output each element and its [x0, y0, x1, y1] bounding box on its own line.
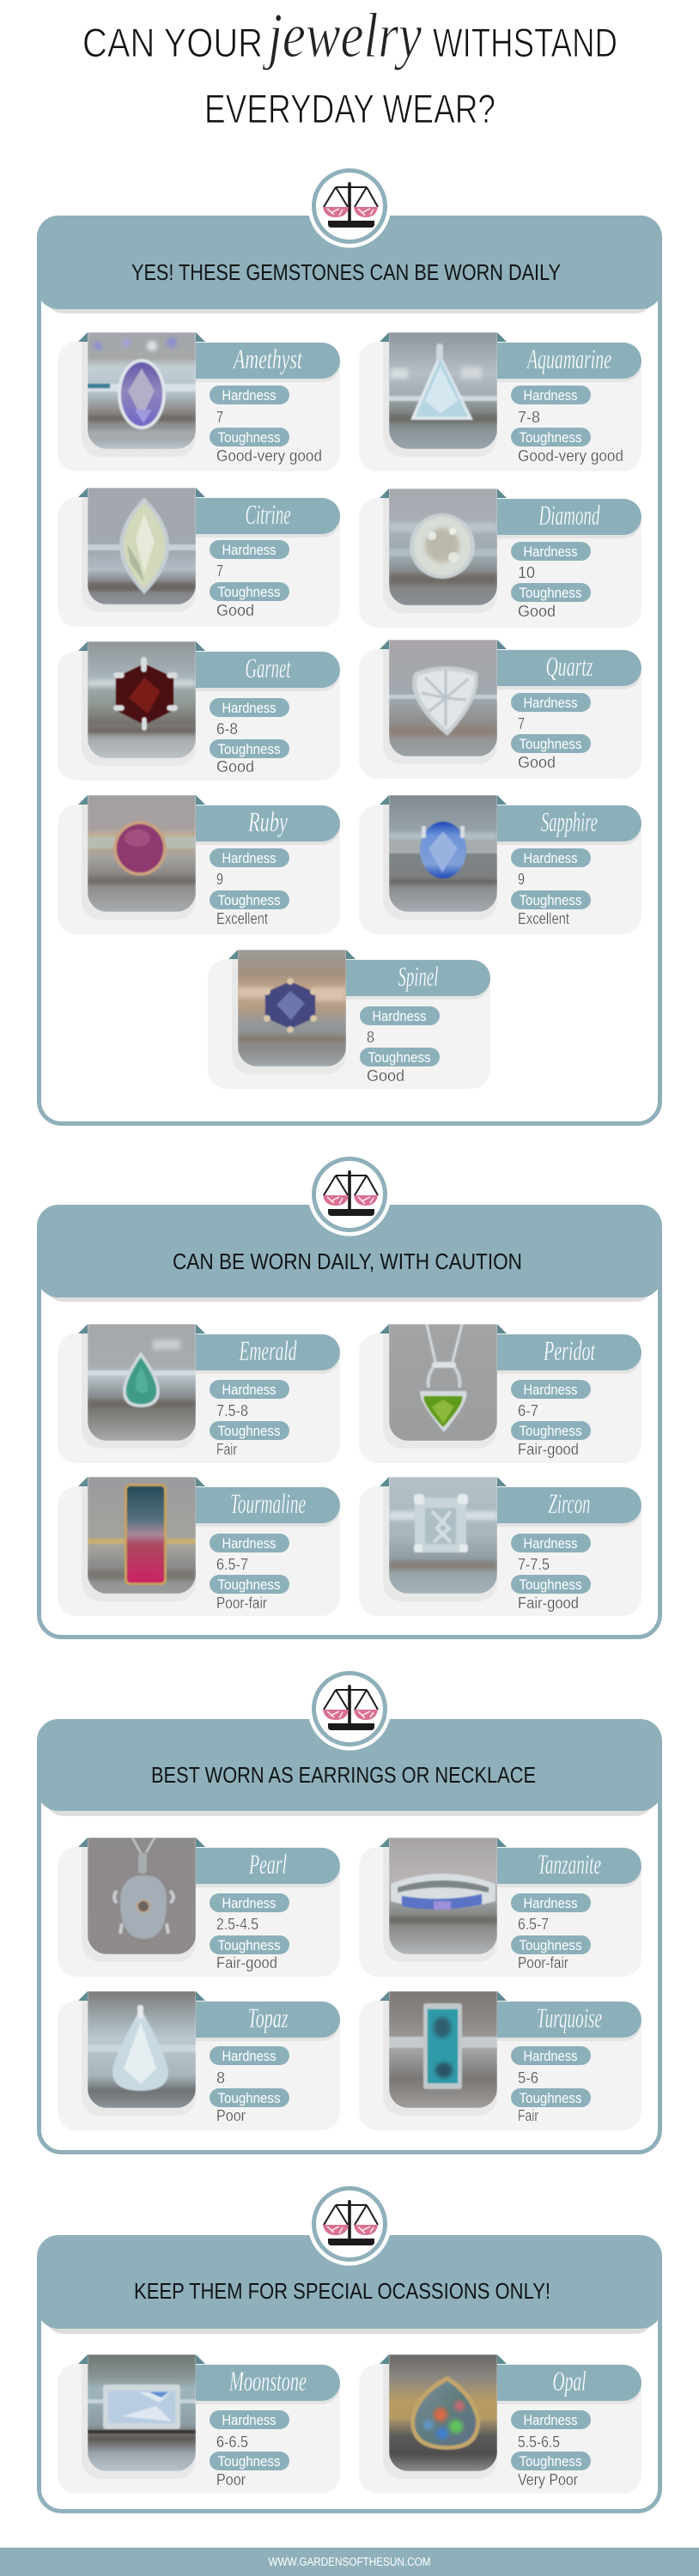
gem name: Citrine: [246, 500, 290, 531]
hardness: [210, 540, 289, 559]
card: Tourmaline: [58, 1477, 340, 1616]
photo: sapphire ring: [389, 795, 497, 912]
hardness value: 2.5-4.5: [216, 1915, 258, 1933]
card: Quartz: [359, 640, 641, 779]
icon: scale with gems: [307, 165, 392, 247]
photo: tanzanite ring: [389, 1838, 497, 1954]
toughness: Toughness: [519, 2453, 582, 2470]
toughness: Toughness: [218, 741, 280, 757]
toughness: Toughness: [519, 1423, 582, 1439]
gem name: Pearl: [248, 1850, 287, 1880]
toughness value: Good: [216, 601, 254, 619]
hardness: Hardness: [524, 695, 577, 711]
hardness: [210, 1380, 289, 1399]
toughness: Toughness: [218, 1423, 280, 1439]
toughness value: Good: [367, 1066, 404, 1084]
hardness: Hardness: [222, 1895, 277, 1911]
panel: earrings or necklace: [37, 1668, 662, 2152]
card: Turquoise: [359, 1991, 641, 2130]
panel: special occasions: [37, 2183, 662, 2511]
gem name: Aquamarine: [526, 344, 611, 375]
toughness value: Poor-fair: [216, 1594, 267, 1612]
hardness: [511, 2410, 591, 2429]
hardness value: 7: [518, 714, 525, 732]
hardness: [511, 2046, 591, 2065]
hardness value: 8: [216, 2069, 225, 2087]
toughness: Toughness: [519, 1937, 582, 1953]
hardness: Hardness: [373, 1008, 426, 1024]
footer: [0, 2548, 699, 2576]
photo: moonstone ring: [88, 2354, 196, 2471]
card: Garnet: [58, 641, 340, 781]
toughness: Toughness: [218, 429, 280, 446]
toughness value: Poor: [216, 2470, 246, 2488]
toughness value: Poor: [216, 2106, 246, 2124]
hardness: Hardness: [222, 700, 277, 716]
section header band: [37, 1205, 662, 1297]
hardness: Hardness: [222, 542, 277, 558]
toughness value: Fair-good: [518, 1594, 579, 1612]
section heading: YES! THESE GEMSTONES CAN BE WORN DAILY: [131, 259, 561, 285]
photo: diamond ring: [389, 489, 497, 605]
hardness: [511, 1893, 591, 1912]
hardness value: 10: [518, 563, 535, 581]
hardness value: 5-6: [518, 2069, 538, 2087]
photo: emerald ring: [88, 1324, 196, 1441]
hardness value: 8: [367, 1028, 374, 1046]
hardness: [210, 2410, 289, 2429]
title: WITHSTAND: [433, 21, 617, 66]
hardness value: 7-7.5: [518, 1555, 550, 1573]
gem name: Topaz: [247, 2003, 289, 2034]
toughness: Toughness: [368, 1049, 431, 1066]
gem name: Spinel: [398, 962, 438, 993]
card: Aquamarine: [359, 332, 641, 471]
toughness value: Very Poor: [518, 2470, 578, 2488]
toughness value: Fair: [216, 1440, 237, 1458]
hardness: [511, 693, 591, 712]
card: Diamond: [359, 489, 641, 628]
photo: spinel ring: [238, 950, 346, 1066]
hardness: Hardness: [524, 2412, 577, 2428]
gem name: Emerald: [239, 1336, 297, 1367]
toughness: Toughness: [519, 1577, 582, 1593]
hardness value: 7.5-8: [216, 1401, 248, 1419]
gem name: Tanzanite: [538, 1850, 601, 1880]
section heading: KEEP THEM FOR SPECIAL OCASSIONS ONLY!: [134, 2278, 550, 2304]
hardness: [210, 386, 289, 404]
card: Spinel: [208, 950, 490, 1089]
toughness: Toughness: [218, 892, 280, 908]
toughness: Toughness: [218, 1577, 280, 1593]
card: Amethyst: [58, 332, 340, 471]
photo: pearl pendant: [88, 1838, 196, 1954]
hardness: Hardness: [524, 2048, 577, 2064]
photo: ruby ring: [88, 795, 196, 912]
photo: tourmaline ring: [88, 1477, 196, 1594]
gem name: Garnet: [246, 653, 291, 684]
card: Citrine: [58, 488, 340, 627]
gem name: Ruby: [247, 807, 288, 838]
hardness value: 6-8: [216, 720, 238, 738]
hardness: Hardness: [222, 2048, 277, 2064]
toughness value: Good: [518, 602, 556, 620]
hardness value: 6-7: [518, 1401, 538, 1419]
toughness: Toughness: [519, 429, 582, 446]
hardness: [511, 542, 591, 561]
toughness: Toughness: [519, 585, 582, 601]
hardness: [210, 1893, 289, 1912]
toughness: Toughness: [519, 2090, 582, 2106]
gem name: Turquoise: [537, 2003, 602, 2034]
hardness value: 6.5-7: [216, 1555, 248, 1573]
gem name: Zircon: [548, 1489, 591, 1520]
hardness: Hardness: [222, 2412, 277, 2428]
photo: turquoise ring: [389, 1991, 497, 2108]
hardness value: 5.5-6.5: [518, 2433, 560, 2451]
card: Emerald: [58, 1324, 340, 1463]
toughness: Toughness: [218, 1937, 280, 1953]
toughness: Toughness: [218, 2090, 280, 2106]
title: [82, 1, 617, 132]
card: Pearl: [58, 1838, 340, 1977]
hardness: [511, 1534, 591, 1552]
hardness: Hardness: [222, 1535, 277, 1552]
hardness: [360, 1006, 440, 1025]
hardness: [210, 698, 289, 717]
card: Topaz: [58, 1991, 340, 2130]
toughness value: Good-very good: [216, 447, 322, 465]
gem name: Quartz: [546, 652, 593, 683]
hardness: Hardness: [222, 387, 277, 404]
hardness value: 6.5-7: [518, 1915, 549, 1933]
card: Peridot: [359, 1324, 641, 1463]
hardness: Hardness: [524, 850, 577, 866]
section header band: [37, 1719, 662, 1811]
toughness value: Good-very good: [518, 447, 623, 465]
photo: garnet ring: [88, 641, 196, 758]
section header band: [37, 216, 662, 309]
hardness: Hardness: [524, 387, 577, 404]
toughness: Toughness: [218, 2453, 280, 2470]
hardness value: 7: [216, 562, 223, 580]
hardness: [210, 1534, 289, 1552]
gem name: Amethyst: [233, 344, 303, 375]
hardness value: 7: [216, 408, 223, 426]
gem name: Peridot: [543, 1336, 596, 1367]
toughness value: Good: [518, 753, 556, 771]
icon: scale with gems: [307, 1668, 392, 1750]
panel: worn daily: [37, 165, 662, 1123]
gem name: Opal: [553, 2366, 586, 2397]
toughness value: Good: [216, 757, 254, 775]
icon: scale with gems: [307, 2183, 392, 2265]
hardness: Hardness: [524, 1895, 577, 1911]
hardness: [210, 848, 289, 867]
icon: scale with gems: [307, 1152, 392, 1236]
photo: topaz ring: [88, 1991, 196, 2108]
hardness value: 9: [216, 870, 223, 888]
title: EVERYDAY WEAR?: [204, 87, 495, 132]
toughness value: Poor-fair: [518, 1953, 568, 1971]
hardness: Hardness: [222, 1382, 277, 1398]
hardness: Hardness: [524, 1535, 577, 1552]
hardness value: 6-6.5: [216, 2433, 248, 2451]
photo: quartz ring: [389, 640, 497, 756]
section heading: BEST WORN AS EARRINGS OR NECKLACE: [151, 1762, 536, 1788]
photo: amethyst ring: [88, 332, 196, 449]
toughness value: Fair-good: [216, 1953, 277, 1971]
card: Moonstone: [58, 2354, 340, 2494]
title: jewelry: [262, 1, 422, 71]
hardness: Hardness: [222, 850, 277, 866]
photo: peridot pendant: [389, 1324, 497, 1441]
hardness: [511, 848, 591, 867]
section header band: [37, 2235, 662, 2329]
panel: caution: [37, 1152, 662, 1637]
gem name: Sapphire: [541, 807, 598, 838]
footer: WWW.GARDENSOFTHESUN.COM: [268, 2555, 431, 2568]
toughness: Toughness: [519, 736, 582, 752]
card: Opal: [359, 2354, 641, 2494]
gem name: Tourmaline: [230, 1489, 306, 1520]
photo: zircon ring: [389, 1477, 497, 1594]
hardness: [511, 1380, 591, 1399]
hardness: Hardness: [524, 1382, 577, 1398]
toughness: Toughness: [519, 892, 582, 908]
photo: citrine ring: [88, 488, 196, 605]
toughness value: Excellent: [518, 909, 569, 927]
hardness value: 9: [518, 870, 525, 888]
photo: opal ring: [389, 2354, 497, 2471]
hardness value: 7-8: [518, 408, 540, 426]
toughness: Toughness: [218, 584, 280, 600]
gem name: Diamond: [538, 501, 600, 532]
hardness: [511, 386, 591, 404]
toughness value: Fair-good: [518, 1440, 579, 1458]
card: Zircon: [359, 1477, 641, 1616]
photo: aquamarine ring: [389, 332, 497, 449]
toughness value: Excellent: [216, 909, 268, 927]
section heading: CAN BE WORN DAILY, WITH CAUTION: [173, 1249, 522, 1274]
toughness value: Fair: [518, 2106, 538, 2124]
card: Ruby: [58, 795, 340, 934]
card: Tanzanite: [359, 1838, 641, 1977]
gem name: Moonstone: [228, 2366, 307, 2397]
hardness: [210, 2046, 289, 2065]
hardness: Hardness: [524, 544, 577, 560]
card: Sapphire: [359, 795, 641, 934]
title: CAN YOUR: [82, 21, 263, 66]
